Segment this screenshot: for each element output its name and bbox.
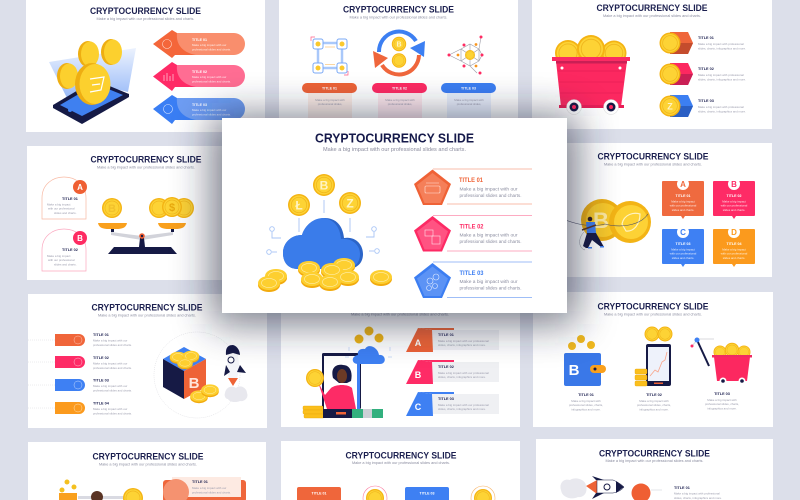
item text	[460, 224, 522, 244]
item 01	[414, 169, 532, 205]
icon: ringed coin	[363, 486, 387, 500]
title pill 01: TITLE 01	[322, 86, 337, 90]
subtitle: Make a big impact with our professional slides and charts.	[99, 462, 197, 466]
list item 03: TITLE 03	[93, 378, 109, 382]
item B: slides, charts, infographics and more.	[438, 375, 486, 379]
illustration: phone chart: TITLE 02	[646, 393, 662, 397]
item text: professional slides and charts.	[460, 239, 522, 244]
item 01	[632, 484, 722, 500]
item text: TITLE 02	[460, 224, 484, 230]
list item 04: professional slides and charts.	[93, 412, 132, 416]
heading: CRYPTOCURRENCY SLIDE	[598, 152, 708, 162]
item 01: Make a big impact with professional	[698, 42, 744, 46]
item 02	[414, 216, 532, 252]
card C: with our professional	[670, 252, 697, 256]
card C: TITLE 03	[676, 242, 690, 246]
item text: professional slides and charts.	[460, 193, 522, 198]
title pill 02: TITLE 02	[392, 86, 407, 90]
item C: Make a big impact with our professional	[438, 403, 489, 407]
card C: slides and charts.	[672, 256, 694, 260]
card C: Make a big impact	[671, 248, 695, 252]
card B: with our professional	[48, 258, 75, 262]
item text: Make a big impact with our	[460, 279, 518, 284]
card A: with our professional	[48, 206, 75, 210]
arrow card 01: Make a big impact with our	[192, 43, 226, 47]
item 01: TITLE 01	[698, 36, 714, 40]
heading: CRYPTOCURRENCY SLIDE	[598, 302, 708, 312]
title pill 03: professional slides,	[457, 102, 481, 106]
icon: network	[448, 36, 484, 74]
panel: slide cube and rocket	[28, 294, 267, 428]
icon: cloud	[283, 218, 363, 269]
card B: TITLE 02	[727, 194, 741, 198]
panel: slide wallet phone cart	[533, 292, 773, 427]
title box 01: TITLE 01	[312, 492, 326, 496]
subtitle: Make a big impact with our professional slides and charts.	[323, 147, 466, 153]
subtitle: Make a big impact with our professional slides and charts.	[350, 16, 448, 20]
item C: slides, charts, infographics and more.	[438, 407, 486, 411]
item text	[459, 177, 522, 198]
title pill 01	[302, 83, 357, 120]
arrow card 02: professional slides and charts.	[192, 80, 231, 84]
subtitle: Make a big impact with our professional slides and charts.	[96, 17, 195, 21]
icon: litecoin coin: Ł	[295, 198, 303, 212]
card A	[662, 178, 704, 219]
card A: TITLE 01	[62, 197, 78, 201]
arrow card 03: professional slides and charts.	[192, 112, 231, 116]
title pill 01: Make a big impact with	[315, 98, 345, 102]
panel: slide phone and arrows	[26, 0, 265, 132]
illustration: phone chart	[635, 326, 672, 412]
illustration: pickaxe and cart: professional slides, charts,	[705, 402, 739, 406]
heading: CRYPTOCURRENCY SLIDE	[596, 3, 708, 13]
card B: TITLE 02	[62, 248, 78, 252]
title card 01: Make a big impact with our	[192, 486, 226, 490]
arrow card 01	[153, 30, 245, 58]
list item 01: TITLE 01	[93, 333, 109, 337]
icon: coin pile	[258, 258, 359, 292]
arrow card 03	[153, 95, 245, 124]
card B: slides and charts.	[723, 208, 745, 212]
illustration: phone chart: Make a big impact with	[639, 399, 669, 403]
title pill 02	[372, 83, 427, 120]
item B: Make a big impact with our professional	[438, 371, 489, 375]
item C: C	[415, 402, 422, 412]
icon: exchange cycle	[373, 32, 425, 74]
item 03: TITLE 03	[698, 99, 714, 103]
panel: bottom slide centre	[281, 441, 520, 500]
item 01: slides, charts, infographics and more.	[698, 46, 746, 50]
list item 04	[28, 402, 132, 416]
illustration: bitcoin cube: B	[189, 375, 200, 392]
illustration: phone chart: infographics and more.	[639, 408, 669, 412]
card D: Make a big impact	[722, 248, 746, 252]
list item 03	[28, 378, 132, 392]
title box 01	[297, 487, 341, 500]
icon: bitcoin coin: B	[320, 178, 329, 192]
title card 01	[163, 477, 246, 500]
panel: bottom slide right	[536, 439, 773, 500]
illustration: cloud with coins	[258, 174, 392, 292]
icon: single coin	[370, 270, 392, 286]
heading: CRYPTOCURRENCY SLIDE	[92, 302, 202, 312]
subtitle: Make a big impact with our professional slides and charts.	[604, 312, 702, 316]
arrow card 02	[153, 62, 245, 91]
item B: B	[415, 370, 422, 380]
subtitle: Make a big impact with our professional slides and charts.	[606, 459, 704, 463]
panel: main centre slide	[222, 118, 567, 313]
panel: slide scale	[27, 146, 266, 280]
list item 02: professional slides and charts.	[93, 366, 132, 370]
title box 03	[405, 487, 449, 500]
item 02: Make a big impact with professional	[698, 73, 744, 77]
card C: C	[680, 228, 686, 237]
card B: Make a big impact	[47, 254, 71, 258]
title pill 03: Make a big impact with	[454, 98, 484, 102]
card B	[42, 229, 87, 271]
list item 04: Make a big impact with our	[93, 407, 127, 411]
illustration: wallet	[564, 335, 606, 412]
connector lines	[267, 200, 379, 254]
illustration: pickaxe and cart: Make a big impact with	[707, 398, 737, 402]
item text: TITLE 01	[459, 177, 484, 184]
illustration: wallet: professional slides, charts,	[569, 403, 603, 407]
list item 03: Make a big impact with our	[93, 384, 127, 388]
icon: zcash coin: Z	[346, 196, 354, 210]
heading: CRYPTOCURRENCY SLIDE	[346, 450, 456, 460]
illustration: miner with coins: B	[593, 208, 609, 233]
item 03: Make a big impact with professional	[698, 105, 744, 109]
icon: pentagon orange	[414, 170, 451, 205]
item 01: TITLE 01	[674, 486, 690, 490]
arrow card 01: professional slides and charts.	[192, 48, 231, 52]
card A	[42, 177, 87, 219]
item B	[406, 360, 499, 384]
arrow card 03: TITLE 03	[192, 103, 207, 107]
drop shadow of centre slide	[212, 116, 577, 324]
item 03: Z	[667, 102, 673, 112]
item 03	[660, 95, 746, 117]
illustration: balance scale	[98, 197, 194, 254]
illustration: wallet: infographics and more.	[571, 408, 601, 412]
title pill 02: professional slides,	[388, 102, 412, 106]
illustration: miner with coins	[560, 199, 651, 250]
subtitle: Make a big impact with our professional slides and charts.	[604, 162, 702, 166]
card B	[713, 178, 755, 219]
item B: TITLE 02	[438, 365, 454, 369]
subtitle: Make a big impact with our professional slides and charts.	[351, 312, 449, 316]
illustration: wallet: TITLE 01	[578, 393, 594, 397]
card B: B	[731, 180, 737, 189]
item text: Make a big impact with our	[460, 186, 518, 192]
card C	[662, 226, 704, 267]
item C: TITLE 03	[438, 397, 454, 401]
list item 04: TITLE 04	[93, 402, 110, 406]
heading: CRYPTOCURRENCY SLIDE	[599, 448, 710, 458]
item text	[460, 270, 522, 290]
item text: professional slides and charts.	[460, 286, 522, 290]
card B: with our professional	[721, 204, 748, 208]
arrow card 02: TITLE 02	[192, 70, 207, 74]
card D: D	[731, 228, 737, 237]
list item 02	[28, 356, 132, 370]
item 02	[660, 63, 746, 85]
card D: slides and charts.	[723, 256, 745, 260]
list item 02: TITLE 02	[93, 356, 109, 360]
item A: slides, charts, infographics and more.	[438, 343, 486, 347]
list item 02: Make a big impact with our	[93, 362, 127, 366]
illustration: coin cart	[552, 35, 630, 114]
title pill 03: TITLE 03	[461, 86, 476, 90]
list item 01	[28, 333, 132, 347]
card B: B	[77, 234, 83, 243]
subtitle: Make a big impact with our professional slides and charts.	[603, 14, 701, 18]
title box 03: TITLE 03	[420, 492, 434, 496]
illustration: bitcoin cube	[154, 332, 240, 418]
title pill 01: professional slides,	[318, 102, 342, 106]
subtitle: Make a big impact with our professional slides and charts.	[98, 314, 196, 318]
card A: TITLE 01	[676, 194, 690, 198]
arrow card 01: TITLE 01	[192, 38, 207, 42]
icon: exchange cycle: B	[396, 42, 402, 48]
illustration: balance scale: $	[169, 202, 175, 214]
card B: slides and charts.	[54, 262, 77, 266]
heading: CRYPTOCURRENCY SLIDE	[90, 6, 201, 16]
heading: CRYPTOCURRENCY SLIDE	[343, 4, 454, 14]
item 02: slides, charts, infographics and more.	[698, 78, 746, 82]
card A: slides and charts.	[672, 208, 694, 212]
illustration: balance scale: B	[108, 203, 116, 215]
title pill 03	[441, 83, 496, 120]
illustration: wallet: B	[569, 362, 580, 379]
icon: chain blocks	[311, 37, 348, 75]
illustration: pickaxe and cart: infographics and more.	[707, 406, 737, 410]
illustration: tablet with coins	[49, 39, 136, 124]
item 02: TITLE 02	[698, 67, 714, 71]
item A: TITLE 01	[438, 333, 454, 337]
panel: slide cards grid	[532, 143, 772, 277]
item 03	[414, 262, 532, 298]
icon: pentagon pink	[414, 216, 451, 252]
title pill 02: Make a big impact with	[385, 98, 415, 102]
item A	[406, 328, 499, 352]
card D	[713, 226, 755, 267]
subtitle: Make a big impact with our professional slides and charts.	[97, 166, 195, 170]
item 01: slides, charts, infographics and more.	[674, 496, 722, 500]
title card 01: professional slides and charts.	[192, 490, 231, 494]
illustration: phone chart: professional slides, charts,	[637, 403, 671, 407]
item 01	[660, 32, 746, 54]
card A: Make a big impact	[671, 200, 695, 204]
card A: with our professional	[670, 204, 697, 208]
panel: slide woman and cloud	[281, 290, 520, 427]
title card 01: TITLE 01	[192, 480, 208, 484]
panel: slide cycle	[279, 0, 518, 120]
list item 03: professional slides and charts.	[93, 388, 132, 392]
item 01: Make a big impact with professional	[674, 492, 720, 496]
illustration: wallet: Make a big impact with	[571, 399, 601, 403]
heading: CRYPTOCURRENCY SLIDE	[92, 452, 204, 462]
heading: CRYPTOCURRENCY SLIDE	[90, 154, 202, 164]
panel: slide cart	[532, 0, 772, 129]
heading: CRYPTOCURRENCY SLIDE	[315, 130, 474, 146]
arrow card 02: Make a big impact with our	[192, 75, 226, 79]
card A: slides and charts.	[54, 211, 77, 215]
list item 01: professional slides and charts.	[93, 343, 132, 347]
illustration: pickaxe and cart: TITLE 03	[714, 392, 730, 396]
icon: ringed coin	[471, 486, 495, 500]
card A: Make a big impact	[47, 202, 71, 206]
panel: bottom slide left	[28, 442, 266, 500]
illustration: rocket launch	[560, 476, 624, 499]
item text: TITLE 03	[460, 270, 484, 277]
item A: A	[415, 338, 422, 348]
subtitle: Make a big impact with our professional slides and charts.	[352, 461, 450, 465]
arrow card 03: Make a big impact with our	[192, 108, 226, 112]
card A: A	[680, 180, 686, 189]
illustration: person with coins	[59, 480, 143, 500]
item text: Make a big impact with our	[460, 232, 518, 238]
card B: Make a big impact	[722, 200, 746, 204]
item 03: slides, charts, infographics and more.	[698, 110, 746, 114]
item C	[406, 392, 499, 416]
icon: pentagon blue	[414, 263, 451, 298]
card D: TITLE 04	[727, 242, 741, 246]
illustration: woman with tablet	[303, 326, 392, 418]
item A: Make a big impact with our professional	[438, 339, 489, 343]
illustration: pickaxe and cart	[690, 338, 752, 410]
card A: A	[77, 183, 83, 192]
illustration: rocket	[224, 345, 247, 402]
list item 01: Make a big impact with our	[93, 338, 127, 342]
card D: with our professional	[721, 252, 748, 256]
